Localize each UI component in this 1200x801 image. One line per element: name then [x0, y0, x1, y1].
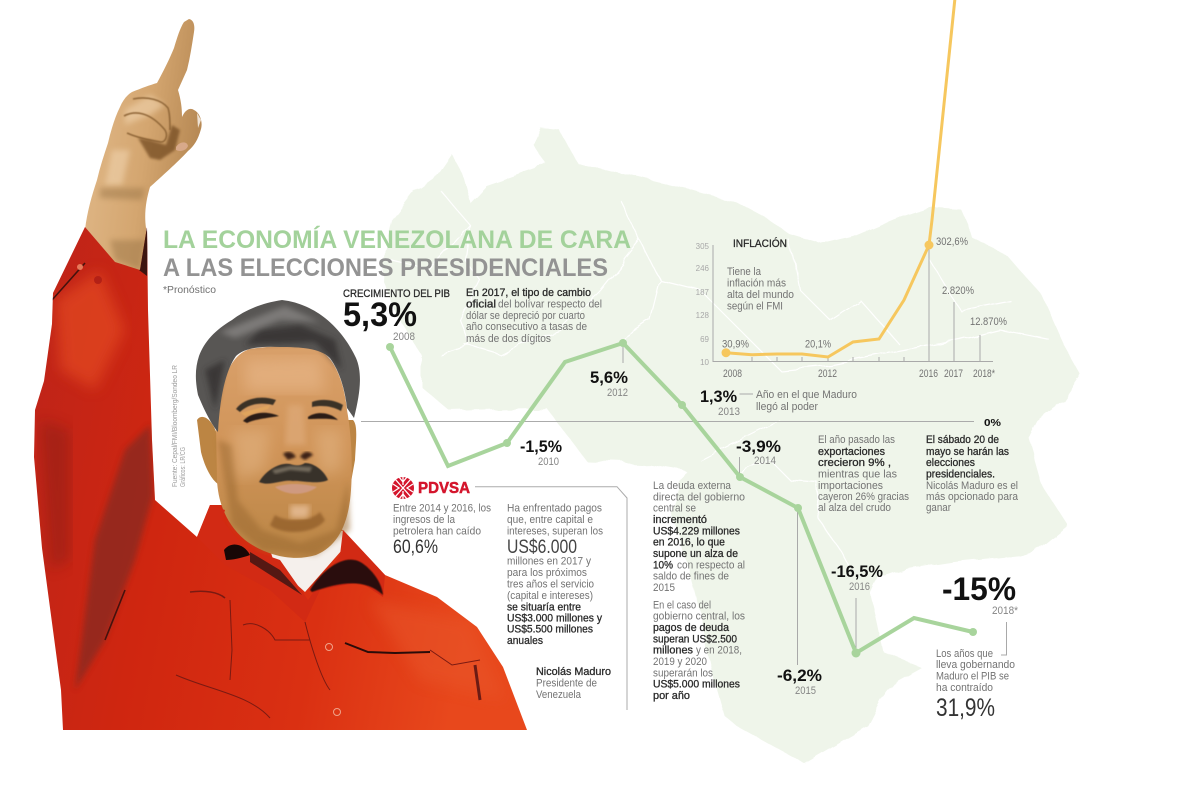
- GDP value labels: 2012: [607, 387, 628, 399]
- text: foreign debt: La deuda externa: [653, 480, 732, 492]
- inflation note: alta del mundo: [727, 289, 794, 301]
- inflation curve: [722, 0, 955, 357]
- inflation values: 12.870%: [970, 316, 1007, 328]
- text: Maduro year: [756, 389, 857, 413]
- GDP value labels: -15%: [942, 571, 1016, 607]
- text: exchange rate: oficial: [466, 298, 496, 310]
- text: payments: se situaría entre: [507, 601, 581, 613]
- text: oil revenues: [393, 503, 491, 558]
- text: payments: US$6.000: [507, 537, 577, 558]
- caption: Nicolás Maduro: Venezuela: [536, 689, 582, 701]
- text: exchange rate: En 2017, el tipo de cambio: [466, 287, 591, 299]
- inflation y axis labels: 187: [696, 288, 710, 297]
- text: exports: crecieron 9% ,: [818, 457, 891, 469]
- text: foreign debt: con respecto al: [677, 559, 745, 571]
- text: foreign debt: 2015: [653, 582, 675, 594]
- title: [163, 225, 631, 282]
- text: payments: para los próximos: [507, 567, 587, 579]
- face shading: [218, 358, 350, 555]
- inflation y axis labels: 69: [700, 335, 710, 344]
- text: foreign debt: 2019 y 2020: [653, 656, 707, 668]
- face: [216, 346, 352, 558]
- GDP value labels: 5,6%: [590, 368, 628, 387]
- GDP value labels: -3,9%: [736, 437, 781, 456]
- text: exchange rate: año consecutivo a tasas de: [466, 321, 587, 333]
- red shirt: [34, 227, 527, 730]
- GDP heading: 2008: [393, 331, 415, 343]
- text: elections: [926, 434, 1019, 514]
- GDP heading: 5,3%: [343, 296, 417, 334]
- panel: PDVSA: [392, 477, 627, 710]
- GDP heading: [343, 288, 450, 343]
- panel frame: [475, 487, 627, 710]
- GDP line chart: [386, 339, 977, 658]
- caption: Nicolás Maduro: Presidente de: [536, 678, 597, 690]
- text: Maduro year: llegó al poder: [756, 401, 818, 413]
- inflation y axis labels: 10: [700, 358, 710, 367]
- text: foreign debt: US$4.229 millones: [653, 525, 740, 537]
- text: exports: importaciones: [818, 480, 883, 492]
- source credit: Gráficos: LR/CG: [180, 447, 187, 487]
- mustache: [259, 463, 328, 494]
- text: contraction: ha contraído: [936, 682, 993, 694]
- inflation year labels: 2017: [944, 368, 963, 380]
- inflation heading: INFLACIÓN: [733, 237, 787, 250]
- text: payments: US$5.500 millones: [507, 624, 593, 636]
- map of Venezuela: [383, 129, 1080, 762]
- text: exports: El año pasado las: [818, 434, 895, 446]
- text: oil revenues: ingresos de la: [393, 514, 456, 526]
- caption: Nicolás Maduro: Nicolás Maduro: [536, 666, 611, 678]
- text: foreign debt: En el caso del: [653, 599, 711, 611]
- hair: [196, 300, 360, 432]
- text: elections: presidenciales.: [926, 468, 995, 480]
- GDP value labels: 2016: [849, 581, 870, 593]
- text: elections: ganar: [926, 502, 951, 514]
- text: oil revenues: petrolera han caído: [393, 525, 481, 537]
- nose: [283, 452, 313, 460]
- inflation chart: [696, 0, 1007, 380]
- text: foreign debt: gobierno central, los: [653, 611, 745, 623]
- inflation year labels: 2008: [723, 368, 742, 380]
- text: exchange rate: del bolívar respecto del: [498, 298, 602, 310]
- inflation y axis labels: [696, 242, 710, 367]
- text: foreign debt: por año: [653, 690, 690, 702]
- inflation values: [722, 236, 1007, 350]
- title: LA ECONOMÍA VENEZOLANA DE CARA: [163, 225, 631, 254]
- text: Maduro year: Año en el que Maduro: [756, 389, 857, 401]
- GDP value labels: 1,3%: [700, 387, 737, 406]
- inflation year labels: [723, 368, 996, 380]
- inflation values: 2.820%: [942, 285, 974, 297]
- text: foreign debt: directa del gobierno: [653, 491, 745, 503]
- text: payments: anuales: [507, 635, 543, 647]
- connector ticks: [623, 343, 1006, 665]
- text: payments: que, entre capital e: [507, 514, 593, 526]
- inflation note: inflación más: [727, 278, 786, 290]
- text: elections: más opcionado para: [926, 491, 1019, 503]
- text: foreign debt: US$5.000 millones: [653, 679, 740, 691]
- GDP value labels: 2015: [795, 685, 816, 697]
- eyebrows and eyes: [236, 398, 343, 423]
- text: oil revenues: Entre 2014 y 2016, los: [393, 503, 491, 515]
- text: elections: mayo se harán las: [926, 446, 1009, 458]
- text: foreign debt: 10%: [653, 559, 673, 571]
- text: contraction: lleva gobernando: [936, 659, 1015, 671]
- text: payments: US$3.000 millones y: [507, 613, 602, 625]
- source credit: Fuente: Cepal/FMI/Bloomberg/Sondeo LR: [172, 365, 179, 487]
- inflation y axis labels: 305: [696, 242, 710, 251]
- zero line: 0%: [984, 417, 1002, 429]
- text: contraction: Maduro el PIB se: [936, 670, 1009, 682]
- GDP value labels: 2014: [754, 455, 776, 467]
- text: payments: [507, 503, 603, 647]
- text: elections: Nicolás Maduro es el: [926, 480, 1018, 492]
- GDP heading: CRECIMIENTO DEL PIB: [343, 288, 450, 300]
- text: exports: mientras que las: [818, 468, 897, 480]
- inflation y axis labels: 246: [696, 264, 710, 273]
- text: exports: al alza del crudo: [818, 502, 891, 514]
- inflation year labels: 2018*: [973, 368, 996, 380]
- text: elections: elecciones: [926, 457, 975, 469]
- inflation axes: [713, 245, 993, 362]
- text: foreign debt: pagos de deuda: [653, 622, 730, 634]
- text: foreign debt: y en 2018,: [696, 645, 742, 657]
- text: payments: (capital e intereses): [507, 590, 593, 602]
- text: contraction: 31,9%: [936, 694, 995, 722]
- text: oil revenues: 60,6%: [393, 537, 438, 558]
- inflation y axis labels: 128: [696, 311, 710, 320]
- GDP value labels: -6,2%: [777, 666, 822, 685]
- text: foreign debt: central se: [653, 503, 696, 515]
- inflation note: Tiene la: [727, 266, 762, 278]
- shirt details: [176, 591, 480, 718]
- text: contraction: [936, 648, 1015, 722]
- text: foreign debt: superan US$2.500: [653, 633, 737, 645]
- text: exchange rate: más de dos dígitos: [466, 333, 551, 345]
- text: payments: Ha enfrentado pagos: [507, 503, 602, 515]
- GDP value labels: [520, 368, 1019, 697]
- PDVSA wordmark: PDVSA: [418, 480, 470, 497]
- text: contraction: Los años que: [936, 648, 993, 660]
- text: foreign debt: superarán los: [653, 667, 713, 679]
- GDP value labels: 2010: [538, 456, 559, 468]
- GDP value labels: -16,5%: [831, 562, 883, 581]
- forearm and hand: [85, 19, 202, 285]
- inflation values: 20,1%: [805, 338, 831, 350]
- text: foreign debt: millones: [653, 645, 693, 657]
- undershirt: [270, 530, 345, 592]
- inflation note: [727, 266, 794, 312]
- text: foreign debt: saldo de fines de: [653, 571, 729, 583]
- text: exchange rate: [466, 287, 602, 345]
- ears: [197, 417, 356, 484]
- inflation values: 302,6%: [936, 236, 968, 248]
- GDP value labels: 2018*: [992, 605, 1019, 617]
- GDP value labels: 2013: [718, 406, 740, 418]
- text: exports: [818, 434, 909, 514]
- text: foreign debt: supone un alza de: [653, 548, 738, 560]
- text: exchange rate: dólar se depreció por cuarto: [466, 310, 585, 322]
- text: elections: El sábado 20 de: [926, 434, 999, 446]
- inflation values: 30,9%: [722, 338, 749, 350]
- GDP value labels: -1,5%: [520, 437, 562, 456]
- source credit: [172, 365, 187, 487]
- text: foreign debt: incrementó: [653, 514, 707, 526]
- text: payments: tres años el servicio: [507, 578, 594, 590]
- icon: PDVSA logo: [392, 477, 414, 499]
- text: exports: cayeron 26% gracias: [818, 491, 909, 503]
- person: Nicolás Maduro: [34, 19, 527, 730]
- text: exports: exportaciones: [818, 446, 885, 458]
- inflation year labels: 2012: [818, 368, 837, 380]
- text: foreign debt: en 2016, lo que: [653, 537, 725, 549]
- collar: [197, 505, 385, 622]
- inflation year labels: 2016: [919, 368, 938, 380]
- forecast note: *Pronóstico: [163, 284, 216, 296]
- caption: Nicolás Maduro: [536, 666, 611, 701]
- text: payments: millones en 2017 y: [507, 555, 591, 567]
- inflation note: según el FMI: [727, 300, 783, 312]
- sleeve shading: [40, 228, 505, 700]
- title: A LAS ELECCIONES PRESIDENCIALES: [163, 254, 608, 282]
- text: payments: intereses, superan los: [507, 525, 603, 537]
- text: foreign debt: [653, 480, 745, 702]
